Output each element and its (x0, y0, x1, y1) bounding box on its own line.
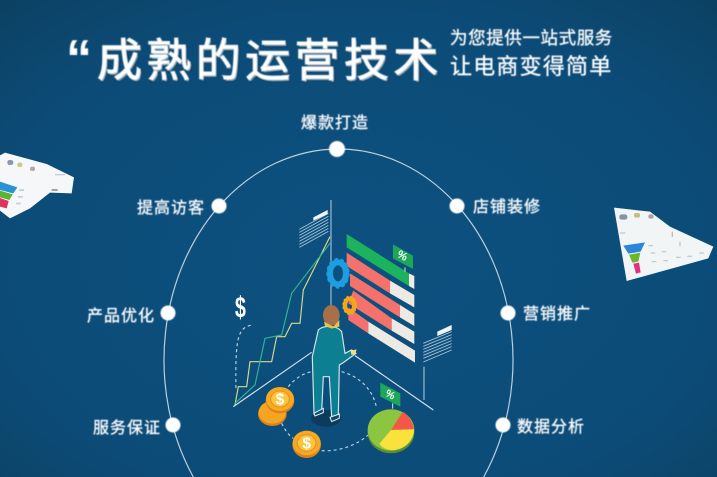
title: “ (66, 30, 92, 88)
node: 数据分析 (496, 418, 585, 436)
report details (619, 213, 704, 262)
percent tag on pie (380, 383, 400, 409)
single coin (292, 431, 321, 458)
person (311, 305, 357, 427)
node: 服务保证: 服务保证 (93, 419, 161, 437)
icon: dollar sign: $ (235, 292, 246, 324)
node: 服务保证 (93, 418, 180, 437)
circular orbit line (164, 149, 513, 477)
node: 爆款打造 (301, 113, 369, 157)
report details (7, 160, 65, 204)
central illustration (233, 200, 452, 458)
subtitle: 为您提供一站式服务 (450, 28, 613, 48)
node: 产品优化 (87, 306, 176, 325)
right flag: text lines (423, 325, 452, 362)
subtitle: 让电商变得简单 (450, 54, 612, 79)
icon: gold gear (343, 297, 356, 314)
line chart (235, 237, 330, 405)
funnel chart (623, 242, 645, 274)
percent tag on pie: % (383, 387, 398, 403)
icon: blue gear (328, 259, 348, 287)
node: 数据分析: 数据分析 (517, 418, 585, 436)
coins stack (258, 387, 294, 426)
node: 营销推广: 营销推广 (523, 305, 591, 323)
dashed connector lines (236, 325, 377, 451)
percent tag on bars: % (395, 249, 409, 264)
node: 产品优化: 产品优化 (87, 307, 155, 325)
node: 提高访客: 提高访客 (137, 199, 205, 217)
pie chart (368, 409, 414, 453)
coins stack: $ (276, 392, 285, 409)
subtitle (450, 28, 613, 79)
percent tag on bars (393, 244, 413, 272)
left report sheet (0, 153, 74, 218)
floor and wall lines (233, 200, 433, 410)
bar chart (347, 234, 415, 363)
title: 成熟的运营技术 (97, 35, 443, 86)
node: 提高访客 (137, 198, 226, 217)
single coin: $ (302, 436, 311, 453)
node: 爆款打造: 爆款打造 (301, 113, 369, 132)
funnel chart (0, 182, 17, 208)
node: 店铺装修: 店铺装修 (473, 198, 541, 216)
title: 成熟的运营技术 (98, 37, 444, 88)
left flag: text lines (299, 210, 328, 247)
right report sheet (614, 208, 713, 281)
